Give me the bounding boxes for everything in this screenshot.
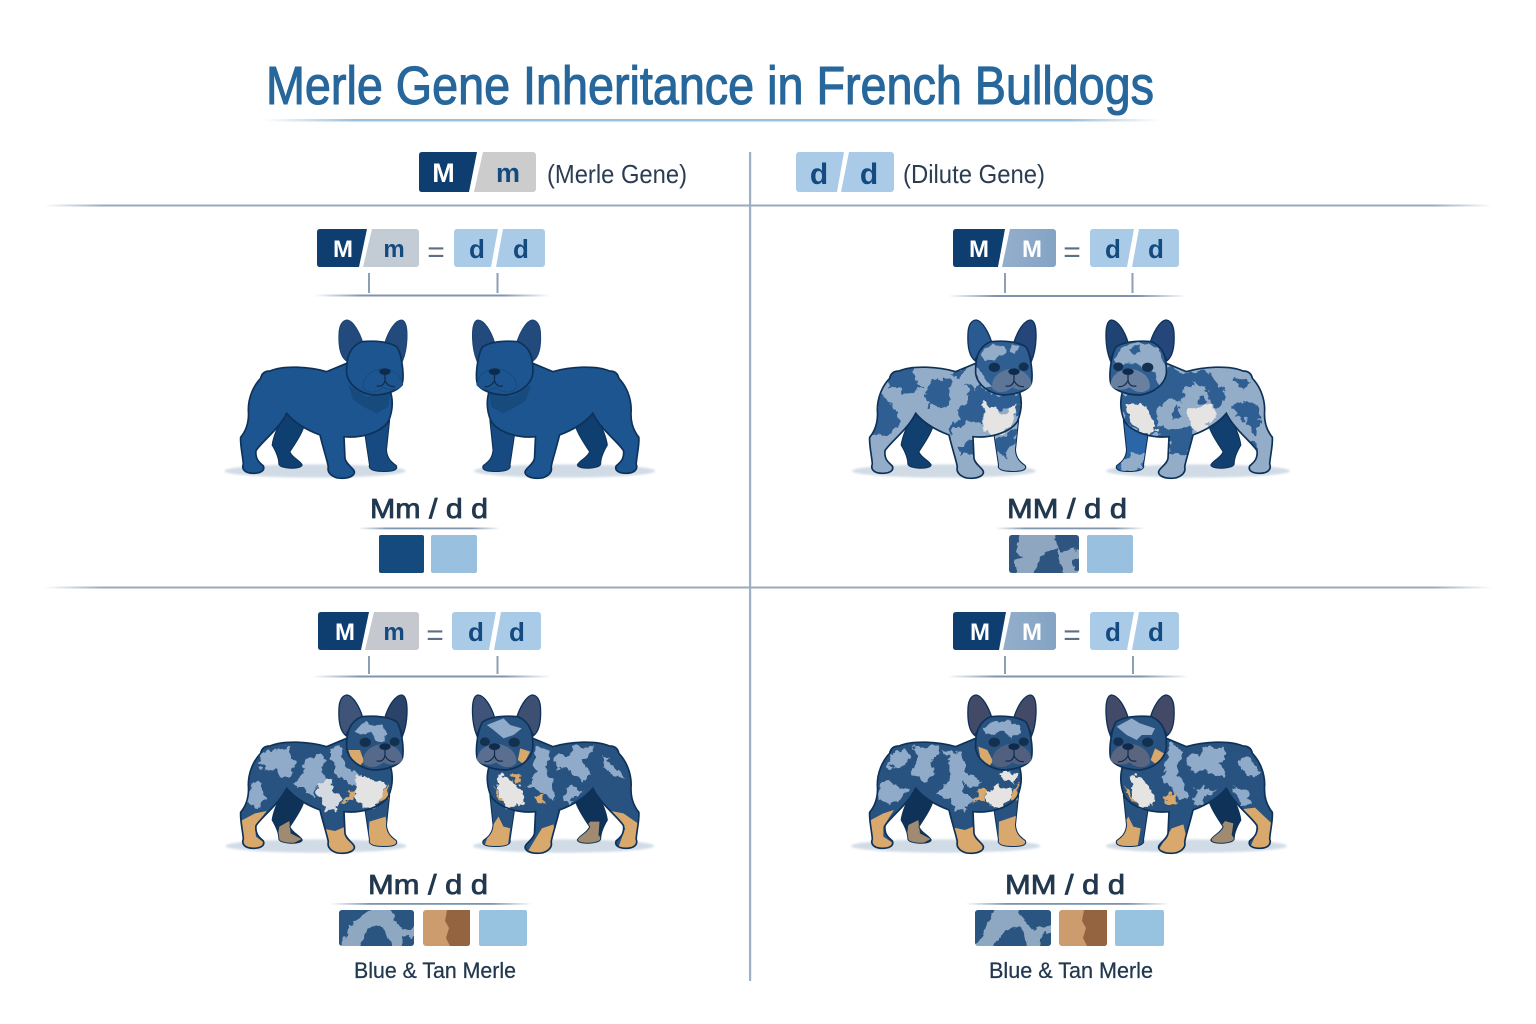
- panel: top left Mm / dd: [224, 229, 655, 573]
- genotype formula: [312, 612, 551, 678]
- genotype label: Mm / d d: [368, 869, 488, 900]
- dog: blue and tan merle right: [1106, 695, 1287, 856]
- genotype formula: d: [509, 617, 525, 647]
- genotype formula: [314, 229, 550, 296]
- title: Merle Gene Inheritance in French Bulldogs: [266, 56, 1154, 116]
- genotype formula: d: [1148, 234, 1164, 264]
- dog: blue merle left: [852, 320, 1036, 478]
- genotype formula: M: [1022, 236, 1042, 263]
- legend: dilute gene: d: [860, 158, 878, 191]
- caption: Blue & Tan Merle: [989, 958, 1153, 983]
- dog: blue and tan merle left: [851, 695, 1040, 856]
- colour swatches: [1009, 535, 1133, 573]
- genotype formula: =: [426, 619, 444, 652]
- genotype formula: =: [427, 236, 445, 269]
- panel: bottom left Mm / dd tan: [225, 612, 654, 983]
- dog: blue and tan merle left: [225, 695, 407, 856]
- colour swatches: [975, 910, 1164, 946]
- dog: blue and tan merle right: [472, 695, 654, 856]
- legend: dilute gene: [796, 152, 1045, 192]
- genotype formula: =: [1063, 236, 1081, 269]
- genotype formula: d: [1105, 234, 1121, 264]
- genotype formula: [947, 612, 1189, 678]
- panel: bottom right MM / dd tan: [851, 612, 1287, 983]
- genotype formula: =: [1063, 619, 1081, 652]
- genotype formula: d: [468, 617, 484, 647]
- dog: blue merle right: [1106, 320, 1290, 478]
- genotype formula: m: [383, 619, 405, 646]
- genotype formula: d: [469, 234, 485, 264]
- genotype formula: [948, 229, 1186, 297]
- genotype formula: d: [1105, 617, 1121, 647]
- genotype formula: m: [383, 236, 405, 263]
- colour swatches: [379, 535, 477, 573]
- legend: dilute gene: (Dilute Gene): [903, 159, 1045, 189]
- legend: dilute gene: d: [810, 158, 828, 191]
- dog: solid blue right: [472, 320, 655, 478]
- genotype formula: d: [513, 234, 529, 264]
- caption: Blue & Tan Merle: [354, 958, 516, 983]
- legend: merle gene: m: [496, 158, 520, 188]
- dog: solid blue left: [224, 320, 407, 478]
- genotype formula: M: [1022, 619, 1042, 646]
- panel: top right MM / dd: [852, 229, 1290, 577]
- colour swatches: [339, 910, 527, 946]
- genotype formula: M: [335, 619, 355, 646]
- genotype formula: M: [969, 236, 989, 263]
- legend: merle gene: [419, 152, 687, 192]
- genotype formula: M: [333, 236, 353, 263]
- legend: merle gene: M: [432, 158, 455, 188]
- legend: merle gene: (Merle Gene): [547, 159, 687, 189]
- genotype label: MM / d d: [1005, 869, 1125, 900]
- genotype formula: M: [970, 619, 990, 646]
- genotype label: Mm / d d: [370, 493, 488, 524]
- genotype formula: d: [1148, 617, 1164, 647]
- genotype label: MM / d d: [1007, 493, 1127, 524]
